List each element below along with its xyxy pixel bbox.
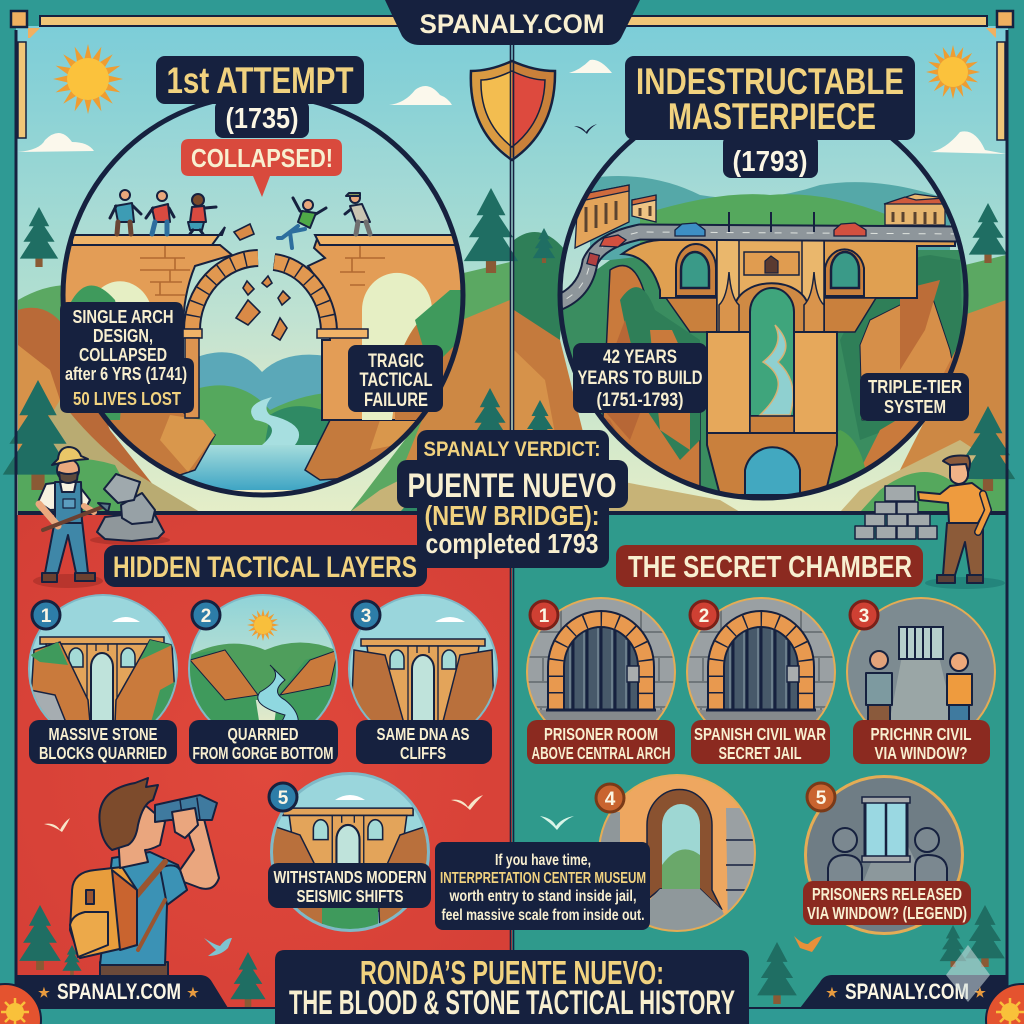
icon: left sun (52, 43, 124, 115)
chamber 1 (526, 597, 676, 764)
text: tragic tactical failure (348, 345, 443, 412)
layer 1: 1 (41, 606, 52, 627)
chamber 4: 4 (605, 789, 616, 810)
chamber 3 (846, 597, 996, 764)
icon: right sun (926, 45, 980, 99)
figure: worker with stones (33, 447, 170, 588)
text: tragic tactical failure: TACTICAL (360, 370, 433, 391)
clouds (18, 60, 1006, 178)
buildings (575, 185, 945, 248)
road and cars (552, 212, 970, 305)
chamber 3: VIA WINDOW? (874, 743, 968, 763)
text: triple-tier system: SYSTEM (884, 397, 946, 417)
title: ronda's puente nuevo: THE BLOOD & STONE TACTICAL HISTORY (289, 984, 735, 1022)
birds on red (44, 795, 483, 832)
right bridge half (308, 236, 470, 420)
layer 1: BLOCKS QUARRIED (39, 743, 167, 763)
heading: the secret chamber (616, 545, 923, 587)
central verdict: completed 1793 (426, 528, 598, 559)
text: single arch design: SINGLE ARCH (72, 307, 174, 327)
title: 1st attempt: 1st ATTEMPT (166, 60, 354, 101)
text: single arch design: COLLAPSED (79, 345, 167, 365)
callout: collapsed (181, 139, 342, 197)
title: 1st attempt: (1735) (226, 103, 298, 135)
chamber 2: SPANISH CIVIL WAR (694, 724, 826, 744)
layer 3: 3 (361, 606, 371, 627)
central verdict: SPANALY VERDICT: (424, 438, 600, 461)
chamber 3: PRICHNR CIVIL (870, 724, 972, 744)
header tab (385, 0, 640, 45)
chamber 2: SECRET JAIL (718, 743, 802, 763)
text: single arch design: after 6 YRS (1741) (65, 364, 187, 384)
title: indestructable masterpiece: INDESTRUCTABLE (636, 61, 904, 102)
text: 42 years to build: YEARS TO BUILD (578, 368, 702, 389)
chamber 5: PRISONERS RELEASED (812, 884, 962, 904)
chamber 4 (596, 774, 756, 932)
info box: interpretation center: If you have time, (495, 852, 591, 869)
chamber 1: 1 (539, 606, 550, 627)
footer band left: ★ (187, 985, 199, 1000)
layer 5 (268, 772, 431, 935)
circle scene: indestructable masterpiece (558, 138, 968, 500)
chamber 2 (686, 597, 836, 764)
text: triple-tier system: TRIPLE-TIER (868, 377, 962, 397)
panel: the secret chamber (512, 511, 1006, 1010)
chamber 3: 3 (859, 606, 869, 627)
layer 5: WITHSTANDS MODERN (274, 867, 426, 887)
layer 2 (188, 594, 338, 764)
trees on red (19, 905, 266, 1007)
layer 2: QUARRIED (228, 724, 298, 744)
title: 1st attempt (156, 56, 364, 138)
chamber 5 (803, 775, 971, 935)
chamber 1: ABOVE CENTRAL ARCH (532, 743, 670, 763)
layer 2: FROM GORGE BOTTOM (192, 743, 334, 763)
text: tragic tactical failure: FAILURE (364, 390, 428, 411)
layer 2: 2 (201, 606, 211, 627)
footer band right: SPANALY.COM (845, 979, 969, 1004)
bird (574, 124, 597, 134)
info box: interpretation center: feel massive scale from inside out. (442, 907, 644, 924)
layer 1: MASSIVE STONE (48, 724, 158, 744)
icon: corner sun left (0, 984, 41, 1024)
text: 42 years to build: 42 YEARS (603, 347, 677, 368)
footer band right: ★ (974, 985, 986, 1000)
text: single arch design: 50 LIVES LOST (73, 389, 181, 409)
callout: collapsed: COLLAPSED! (191, 143, 333, 173)
footer band left: SPANALY.COM (57, 979, 181, 1004)
info box: interpretation center (435, 842, 650, 930)
text: triple-tier system (860, 373, 969, 421)
stone arch (192, 258, 258, 330)
text: single arch design: DESIGN, (93, 326, 153, 346)
info box: interpretation center: INTERPRETATION CENTER MUSEUM (440, 870, 646, 887)
layer 3 (348, 594, 498, 764)
title: ronda's puente nuevo (275, 950, 749, 1024)
figure: worker with bricks (855, 456, 1005, 589)
footer band left (16, 975, 275, 1024)
title: ronda's puente nuevo: RONDA’S PUENTE NUEVO: (360, 954, 664, 991)
gorge and cliffs (555, 250, 970, 500)
chamber 5: VIA WINDOW? (LEGEND) (807, 903, 967, 923)
chamber 5: 5 (816, 788, 827, 809)
circle scene: first attempt collapse (60, 95, 470, 495)
layer 5: SEISMIC SHIFTS (296, 886, 404, 906)
figures on bridge (110, 190, 370, 248)
figure: hiker with binoculars (70, 778, 219, 976)
panel: hidden tactical layers (16, 511, 512, 1010)
text: 42 years to build: (1751-1793) (596, 390, 684, 411)
footer band right: ★ (826, 985, 838, 1000)
icon: corner sun right (986, 984, 1024, 1024)
chamber 1: PRISONER ROOM (544, 724, 658, 744)
vertical frame lines (510, 40, 514, 950)
text: tragic tactical failure: TRAGIC (368, 351, 424, 372)
text: single arch design (60, 302, 194, 413)
title: indestructable masterpiece: (1793) (732, 146, 808, 178)
info box: interpretation center: worth entry to stand inside jail, (449, 888, 636, 905)
layer 3: SAME DNA AS (376, 724, 470, 744)
frame: gold top rules and corners (11, 11, 1013, 140)
heading: hidden tactical layers: HIDDEN TACTICAL LAYERS (113, 551, 417, 584)
text: 42 years to build (573, 343, 707, 413)
falling stones (234, 224, 290, 340)
header tab: SPANALY.COM (420, 9, 604, 39)
layer 5: 5 (278, 788, 289, 809)
title: indestructable masterpiece: MASTERPIECE (668, 96, 876, 137)
left bridge half (66, 244, 233, 358)
panel: sky and landscape (16, 26, 1008, 516)
bird: blue (204, 938, 232, 956)
heading: the secret chamber: THE SECRET CHAMBER (628, 549, 912, 584)
trees (3, 188, 1015, 491)
watermark gem (946, 945, 990, 1002)
chamber 2: 2 (699, 606, 709, 627)
main bridge (622, 240, 955, 298)
layer 3: CLIFFS (400, 743, 446, 763)
layer 1 (28, 594, 178, 764)
footer band left: ★ (38, 985, 50, 1000)
central verdict: PUENTE NUEVO (408, 467, 616, 505)
central verdict (397, 430, 628, 568)
heading: hidden tactical layers (104, 545, 427, 587)
footer band right (749, 975, 1009, 1024)
icon: shield (471, 61, 555, 160)
title: indestructable masterpiece (625, 56, 915, 178)
central verdict: (NEW BRIDGE): (424, 500, 600, 531)
